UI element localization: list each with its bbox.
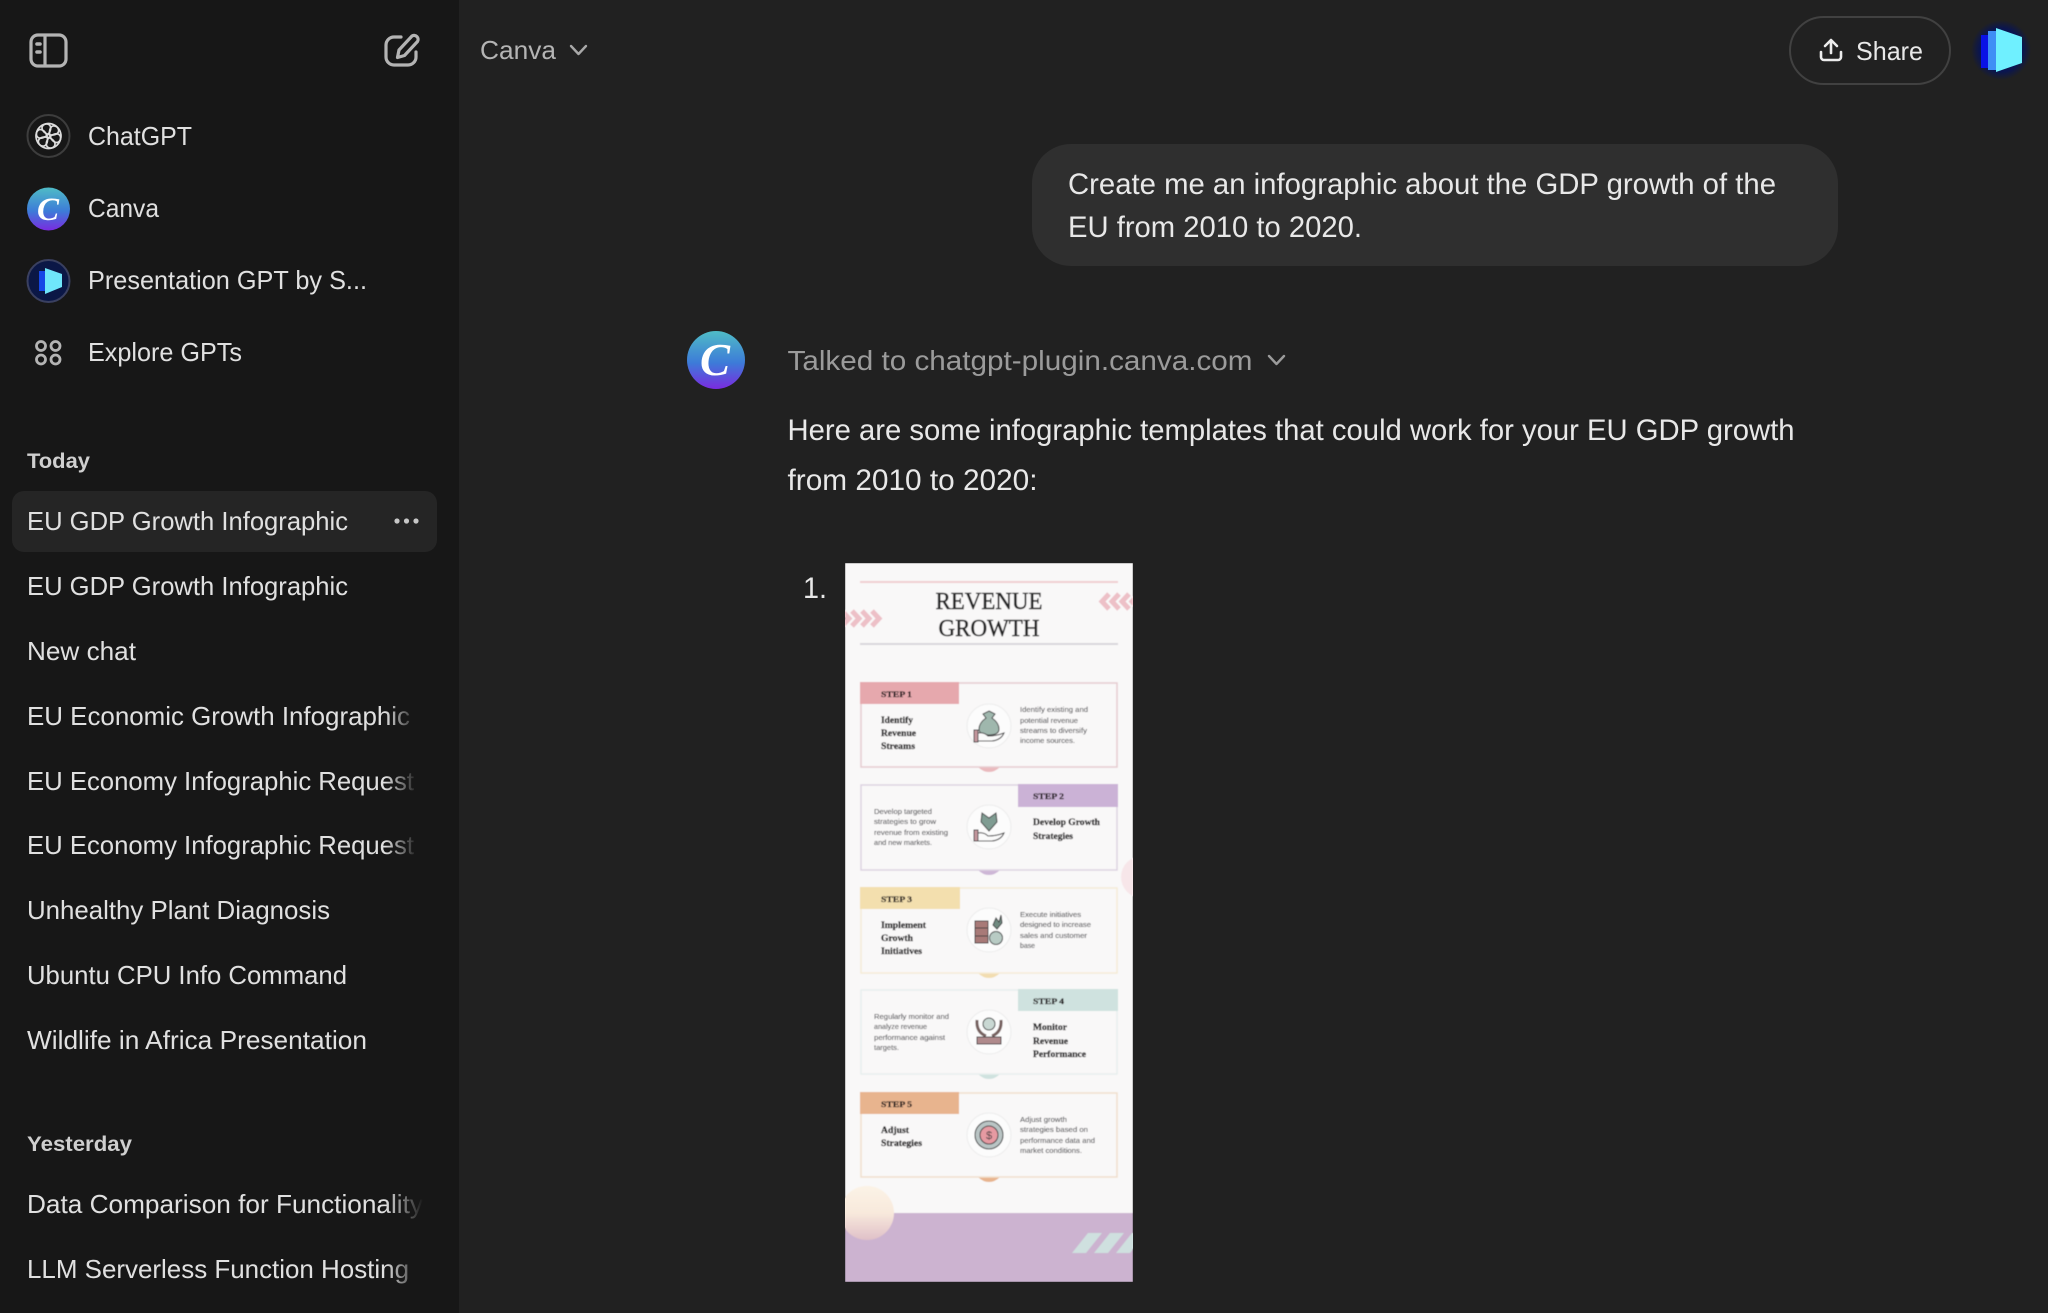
assistant message text: from 2010 to 2020: (788, 464, 1038, 497)
step 5: Adjust growth (1020, 1115, 1067, 1124)
icon: Canva assistant avatar (687, 331, 745, 389)
step 5: Strategies (881, 1139, 922, 1149)
step 2: Strategies (1033, 832, 1073, 842)
step 1: potential revenue (1020, 716, 1078, 725)
icon: Canva: C (37, 192, 60, 228)
step 5: Adjust (881, 1126, 910, 1136)
step 2 (861, 784, 1118, 875)
chat history: yesterday: Data Comparison for Functionality (27, 1189, 423, 1219)
step 3 (860, 887, 1117, 978)
chat history: today: Ubuntu CPU Info Command (27, 960, 347, 990)
step 5: STEP 5 (881, 1099, 912, 1109)
plugin status line: Talked to chatgpt-plugin.canva.com (788, 345, 1252, 376)
user message bubble: EU from 2010 to 2020. (1068, 211, 1362, 244)
button: share: Share (1856, 36, 1923, 66)
header: model selector: Canva (480, 35, 557, 65)
step 3: designed to increase (1020, 920, 1091, 929)
step 4 (861, 989, 1118, 1079)
chat history: today (27, 571, 418, 1055)
step 3: Initiatives (881, 947, 922, 957)
icon: hands with coin (974, 1017, 1004, 1045)
chat history: yesterday (27, 1180, 423, 1290)
icon: explore GPTs (36, 342, 60, 364)
step 3: Implement (881, 921, 927, 931)
step 4: targets. (874, 1043, 899, 1052)
step 4: Revenue (1033, 1037, 1068, 1047)
title (860, 581, 1118, 645)
panel: sidebar (0, 0, 459, 1313)
step 1: STEP 1 (881, 689, 912, 699)
assistant message text (788, 414, 1794, 497)
heading: Yesterday: Yesterday (27, 1133, 132, 1156)
icon: coins and plant (974, 914, 1004, 946)
active chat row (12, 491, 437, 552)
icon: dollar gear: $ (986, 1130, 992, 1142)
step 4: Performance (1033, 1050, 1086, 1060)
icon: money bag in hand (972, 710, 1006, 744)
step 5: strategies based on (1020, 1125, 1088, 1134)
step 3: Execute initiatives (1020, 910, 1081, 919)
nav label: Explore GPTs: Explore GPTs (88, 337, 242, 367)
active chat row: EU GDP Growth Infographic (27, 506, 348, 536)
step 1: Streams (881, 742, 915, 752)
icon: ChatGPT (28, 115, 70, 157)
step 2: Develop Growth (1033, 818, 1101, 828)
nav label: ChatGPT: ChatGPT (88, 121, 192, 151)
step 1: income sources. (1020, 736, 1075, 745)
icon: dollar gear (974, 1120, 1004, 1150)
chat history: yesterday: LLM Serverless Function Hosting (27, 1254, 409, 1284)
step 3: sales and customer (1020, 931, 1088, 940)
user message bubble: Create me an infographic about the GDP growth of the (1068, 168, 1776, 201)
chat history: today: Unhealthy Plant Diagnosis (27, 895, 330, 925)
icon: plant in hand (972, 812, 1006, 842)
chat history: today: EU Economic Growth Infographic (27, 701, 410, 731)
heading: Today: Today (27, 450, 90, 473)
chat history: today: EU Economy Infographic Request (27, 766, 415, 796)
decorative circle (840, 1186, 894, 1240)
icon: profile avatar (1971, 20, 2031, 80)
icon: Canva (27, 188, 70, 230)
nav label: Canva: Canva (88, 193, 160, 223)
panel: infographic thumbnail (845, 563, 1133, 1282)
step 2: strategies to grow (874, 817, 937, 826)
list number: 1. (803, 572, 827, 605)
step 4: STEP 4 (1033, 996, 1065, 1006)
nav label: Presentation GPT: Presentation GPT by S... (88, 265, 367, 295)
step 3: base (1020, 941, 1035, 950)
chevrons left (842, 611, 879, 626)
title: GROWTH (938, 616, 1040, 642)
step 5: market conditions. (1020, 1146, 1082, 1155)
step 3: STEP 3 (881, 894, 912, 904)
step 3: Growth (881, 934, 914, 944)
step 2: Develop targeted (874, 807, 932, 816)
chat history: today: New chat (27, 636, 137, 666)
assistant message text: Here are some infographic templates that could work for your EU GDP growth (788, 414, 1794, 447)
step 2: revenue from existing (874, 828, 948, 837)
chat history: today: Wildlife in Africa Presentation (27, 1025, 367, 1055)
step 4: Regularly monitor and (874, 1012, 949, 1021)
icon: toggle sidebar (31, 35, 66, 66)
decorative pink circle (1121, 857, 1133, 897)
step 1 (860, 682, 1117, 772)
chevrons right (1102, 594, 1139, 609)
title: REVENUE (936, 589, 1042, 615)
step 4: performance against (874, 1033, 946, 1042)
step 1: Identify existing and (1020, 705, 1088, 714)
step 4: analyze revenue (874, 1022, 927, 1031)
icon: Canva assistant avatar: C (700, 335, 731, 385)
step 1: Identify (881, 716, 913, 726)
footer stripes (1072, 1232, 1133, 1254)
step 2: and new markets. (874, 838, 932, 847)
chat history: today: EU Economy Infographic Request (27, 830, 415, 860)
icon: new chat (386, 35, 418, 65)
step 2: STEP 2 (1033, 791, 1064, 801)
user message bubble (1032, 144, 1838, 266)
button: share (1790, 17, 1950, 84)
step 1: streams to diversify (1020, 726, 1087, 735)
icon: Presentation GPT (28, 260, 70, 302)
step 5 (860, 1092, 1117, 1182)
chat history: today: EU GDP Growth Infographic (27, 571, 348, 601)
step 1: Revenue (881, 729, 916, 739)
footer band (845, 1213, 1133, 1282)
step 4: Monitor (1033, 1023, 1068, 1033)
step 5: performance data and (1020, 1136, 1095, 1145)
